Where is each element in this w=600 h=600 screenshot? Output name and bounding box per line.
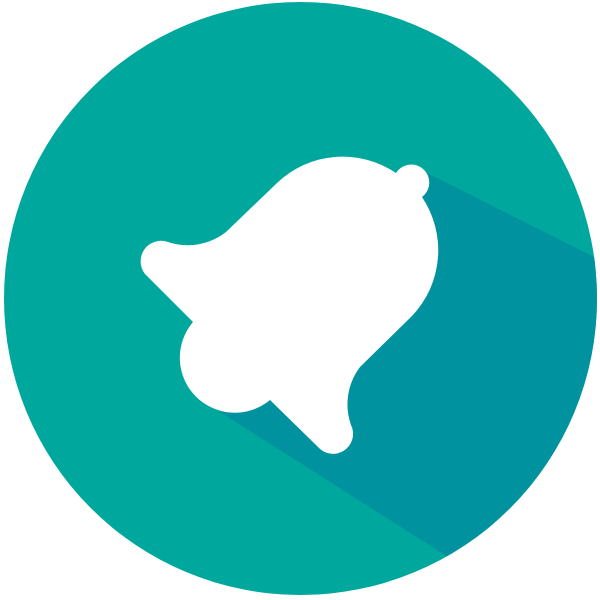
long shadow <box>220 173 597 556</box>
icon: white bell <box>141 157 438 454</box>
